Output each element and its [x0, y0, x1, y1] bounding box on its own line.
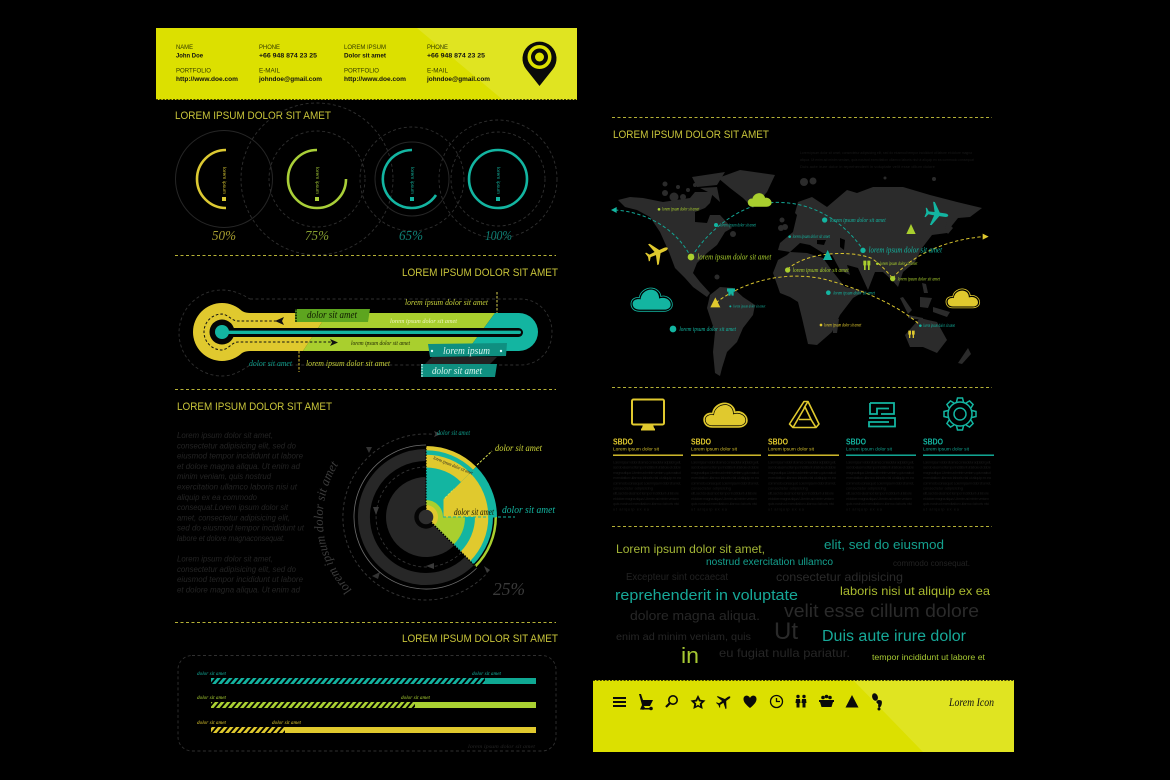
gauge 50%: 50% — [212, 229, 236, 244]
text block: paragraphs: exercitation ullamco laboris nisi ut — [177, 482, 298, 492]
ribbon: dolor sit amet teal — [421, 364, 497, 377]
column 1: exercitation ullamco laboris nisi ut aliquip ex ea — [613, 475, 682, 480]
panel: contact header: http://www.doe.com — [176, 76, 238, 83]
label: dolor sit amet — [454, 507, 494, 517]
gauge 50% — [176, 130, 272, 244]
bar teal: dolor sit amet — [197, 671, 226, 677]
panel: word cloud: commodo consequat. — [893, 558, 970, 568]
icon: menu — [613, 697, 626, 707]
column 5: magna aliqua. Ut enim ad minim veniam, quis nostrud — [923, 470, 991, 475]
icon: clock — [770, 696, 782, 708]
column 4 — [846, 403, 916, 511]
panel: contact header: LOREM IPSUM — [344, 44, 386, 51]
map labels: lorem ipsum dolor sit amet — [898, 276, 940, 282]
panel: word cloud: velit esse cillum dolore — [784, 601, 979, 621]
panel: contact header: PHONE — [427, 44, 449, 51]
label: dolor sit amet — [437, 428, 471, 437]
pie wedge — [426, 446, 497, 568]
map labels: lorem ipsum dolor sit amet — [793, 267, 849, 274]
panel: contact header: Dolor sit amet — [344, 52, 387, 60]
map labels: lorem ipsum dolor sit amet — [880, 262, 918, 267]
map labels: lorem ipsum dolor sit amet — [923, 324, 955, 329]
panel: contact header: John Doe — [176, 52, 203, 60]
label: dolor sit amet — [249, 358, 293, 368]
column 5: SBDO — [923, 436, 943, 446]
routes — [615, 202, 983, 325]
column 2: elit, sed do eiusmod tempor incididunt ut labore — [691, 491, 758, 496]
bar lime — [197, 695, 536, 708]
map labels: lorem ipsum dolor sit amet — [720, 223, 757, 228]
heading: map: LOREM IPSUM DOLOR SIT AMET — [613, 129, 769, 141]
text block: paragraphs: et dolore magna aliqua. Ut enim ad — [177, 462, 301, 471]
column 4: elit, sed do eiusmod tempor incididunt ut labore — [846, 491, 913, 496]
icon: cart — [639, 694, 653, 710]
map labels: lorem ipsum dolor sit amet — [824, 324, 862, 329]
bar yellow: dolor sit amet — [272, 720, 301, 726]
arrow: left — [275, 317, 284, 325]
map: continents — [618, 170, 982, 376]
column 5: elit, sed do eiusmod tempor incididunt ut labore — [923, 491, 990, 496]
panel: circular gauges — [176, 103, 557, 255]
panel: word cloud: Duis aute irure dolor — [822, 628, 966, 645]
map labels: lorem ipsum dolor sit amet — [869, 245, 942, 255]
icon: yellow cloud — [946, 289, 980, 308]
icon: yellow plane — [642, 238, 672, 268]
column 1: consectetur adipisicing — [613, 486, 653, 490]
column 4: et dolore magna aliqua. Ut enim ad minim veniam — [846, 496, 913, 501]
gauge 65%: 65% — [399, 229, 423, 244]
column 4: exercitation ullamco laboris nisi ut aliquip ex ea — [846, 475, 915, 480]
column 2: commodo consequat. Lorem ipsum dolor sit amet, — [691, 480, 759, 485]
map labels: lorem ipsum dolor sit amet — [733, 304, 766, 309]
column 2 — [691, 403, 761, 511]
column 3: SBDO — [768, 436, 788, 446]
panel: word cloud: tempor incididunt ut labore et — [872, 652, 986, 662]
icon: star — [690, 695, 706, 709]
column 3: quis nostrud exercitation ullamco laboris nisi — [768, 501, 834, 506]
column 3: Lorem ipsum dolor sit amet, consectetur adipisicing elit, — [768, 460, 836, 464]
text block: paragraphs: amet, consectetur adipisicing elit, — [177, 513, 290, 522]
icon: plane — [713, 690, 735, 712]
panel: contact header: PORTFOLIO — [176, 68, 211, 74]
text block: map intro: Lorem ipsum dolor sit amet, consectetur adipisicing elit, sed do eiusmod tempor incididunt ut labore et dolore magna — [800, 150, 973, 155]
panel: icon footer — [593, 680, 1014, 752]
ribbon: dolor sit amet lime: dolor sit amet — [307, 310, 357, 321]
label: lorem ipsum dolor sit amet — [390, 318, 457, 325]
map labels: lorem ipsum dolor sit amet — [793, 235, 831, 240]
column 1: Lorem ipsum dolor sit — [613, 446, 660, 452]
column 3: commodo consequat. Lorem ipsum dolor sit amet, — [768, 480, 836, 485]
map labels: lorem ipsum dolor sit amet — [833, 291, 875, 296]
label: lorem ipsum dolor sit amet — [405, 297, 489, 307]
panel: feature columns — [613, 398, 994, 511]
panel: progress bars — [178, 656, 556, 751]
column 1: ut aliquip ex ea — [613, 506, 650, 511]
panel: contact header: NAME — [176, 44, 194, 51]
text block: paragraphs: labore et dolore magnaconsequat. — [177, 534, 285, 543]
text block: paragraphs: eiusmod tempor incididunt ut labore — [177, 575, 304, 584]
text block: paragraphs: minim veniam, quis nostrud — [177, 472, 272, 481]
panel: contact header: E-MAIL — [427, 68, 448, 74]
column 1: sed do eiusmod tempor incididunt ut labore et dolore — [613, 465, 682, 470]
label: lorem ipsum dolor sit amet — [432, 456, 473, 477]
column 3: magna aliqua. Ut enim ad minim veniam, quis nostrud — [768, 470, 836, 475]
column 4: commodo consequat. Lorem ipsum dolor sit amet, — [846, 480, 914, 485]
panel: contact header: +66 948 874 23 25 — [427, 52, 485, 60]
column 3: ut aliquip ex ea — [768, 506, 805, 511]
arrow: right — [330, 339, 338, 346]
bar lime: dolor sit amet — [197, 695, 226, 701]
panel: word cloud: laboris nisi ut aliquip ex ea — [840, 584, 990, 598]
text block: paragraphs: eiusmod tempor incididunt ut labore — [177, 452, 304, 461]
column 5 — [923, 398, 994, 511]
arrow — [434, 431, 441, 437]
icon: basket — [819, 695, 834, 707]
gauge 100%: 100% — [485, 229, 512, 244]
panel: word cloud: reprehenderit in voluptate — [615, 587, 798, 604]
heading: progress bars: LOREM IPSUM DOLOR SIT AMET — [402, 633, 558, 645]
map labels: lorem ipsum dolor sit amet — [679, 326, 736, 333]
panel: contact header: +66 948 874 23 25 — [259, 52, 317, 60]
gauge 65%: lorem ipsum — [410, 167, 415, 194]
column 5: Lorem ipsum dolor sit — [923, 446, 970, 452]
column 5: Lorem ipsum dolor sit amet, consectetur adipisicing elit, — [923, 460, 991, 464]
panel: word cloud: nostrud exercitation ullamco — [706, 557, 833, 568]
panel: word cloud — [615, 537, 990, 668]
gauge 100% — [439, 120, 557, 244]
map labels: lorem ipsum dolor sit amet — [662, 208, 700, 213]
label: Lorem Icon: Lorem Icon — [948, 695, 994, 709]
column 5: quis nostrud exercitation ullamco laboris nisi — [923, 501, 989, 506]
ribbon: lorem ipsum teal — [428, 343, 507, 357]
column 4: ut aliquip ex ea — [846, 506, 883, 511]
column 3: Lorem ipsum dolor sit — [768, 446, 815, 452]
column 4: consectetur adipisicing — [846, 486, 886, 490]
icon: lime cloud — [748, 193, 771, 207]
column 3: exercitation ullamco laboris nisi ut aliquip ex ea — [768, 475, 837, 480]
column 3: sed do eiusmod tempor incididunt ut labore et dolore — [768, 465, 837, 470]
text block: paragraphs: Lorem ipsum dolor sit amet, — [177, 554, 273, 564]
column 2: quis nostrud exercitation ullamco laboris nisi — [691, 501, 757, 506]
panel: word cloud: in — [681, 643, 699, 668]
panel: thermometer bar — [179, 290, 552, 377]
column 5: consectetur adipisicing — [923, 486, 963, 490]
panel: word cloud: Lorem ipsum dolor sit amet, — [616, 542, 765, 556]
column 4: SBDO — [846, 436, 866, 446]
column 1: SBDO — [613, 436, 633, 446]
panel: contact header — [156, 28, 577, 100]
column 2: exercitation ullamco laboris nisi ut aliquip ex ea — [691, 475, 760, 480]
text block: paragraphs: consectetur adipisicing elit, sed do — [177, 441, 297, 450]
ribbon: dolor sit amet teal: dolor sit amet — [432, 366, 482, 377]
panel: word cloud: elit, sed do eiusmod — [824, 537, 944, 552]
heading: timeline bar: LOREM IPSUM DOLOR SIT AMET — [402, 267, 558, 279]
icon: location pin — [522, 42, 556, 86]
chart: radial pie — [314, 428, 556, 600]
panel: word cloud: enim ad minim veniam, quis — [616, 631, 751, 643]
panel: word cloud: consectetur adipisicing — [776, 570, 903, 584]
icon: people — [727, 261, 915, 338]
label: 25%: 25% — [493, 579, 525, 599]
column 1: quis nostrud exercitation ullamco laboris nisi — [613, 501, 679, 506]
column 2: ut aliquip ex ea — [691, 506, 728, 511]
text block: paragraphs: consectetur adipisicing elit, sed do — [177, 565, 297, 574]
column 3 — [768, 402, 839, 511]
column 5: ut aliquip ex ea — [923, 506, 960, 511]
column 5: exercitation ullamco laboris nisi ut aliquip ex ea — [923, 475, 992, 480]
caption: lorem ipsum dolor sit amet — [468, 744, 536, 750]
bar yellow: dolor sit amet — [197, 720, 226, 726]
panel: contact header: PHONE — [259, 44, 281, 51]
map labels — [658, 208, 955, 333]
column 2: Lorem ipsum dolor sit amet, consectetur adipisicing elit, — [691, 460, 759, 464]
icon: cloud — [704, 403, 748, 428]
bar yellow — [197, 720, 536, 733]
panel: contact header: johndoe@gmail.com — [258, 76, 322, 83]
icon: tents — [710, 224, 916, 307]
curved label: lorem ipsum dolor sit amet — [314, 461, 352, 595]
bar teal — [197, 671, 536, 684]
text block: map intro: aliqua. Ut enim ad minim veniam, quis nostrud exercitation ullamco laboris nisi ut aliquip ex ea commodo consequat — [800, 157, 975, 162]
gauge 65% — [360, 127, 464, 244]
gauge 75%: lorem ipsum — [315, 167, 320, 194]
map labels: lorem ipsum dolor sit amet — [697, 252, 772, 262]
text block: paragraphs — [177, 431, 305, 594]
text block: paragraphs: consequat.Lorem ipsum dolor sit — [177, 503, 289, 512]
column 2: SBDO — [691, 436, 711, 446]
map overlays: routes, icons, labels — [611, 193, 989, 338]
panel: word cloud: eu fugiat nulla pariatur. — [719, 646, 850, 660]
column 3: elit, sed do eiusmod tempor incididunt ut labore — [768, 491, 835, 496]
column 4: Lorem ipsum dolor sit amet, consectetur adipisicing elit, — [846, 460, 914, 464]
panel: word cloud: Ut — [774, 618, 798, 645]
text block: paragraphs: aliquip ex ea commodo — [177, 493, 258, 502]
ribbon: lorem ipsum teal: lorem ipsum — [443, 345, 490, 357]
icon: people — [796, 695, 806, 708]
label: lorem ipsum dolor sit amet — [351, 340, 410, 347]
gauge 75%: 75% — [305, 229, 329, 244]
gauge 75% — [241, 103, 393, 255]
column 2: magna aliqua. Ut enim ad minim veniam, quis nostrud — [691, 470, 759, 475]
text block: paragraphs: et dolore magna aliqua. Ut enim ad — [177, 585, 301, 594]
bar teal: dolor sit amet — [472, 671, 501, 677]
column 3: et dolore magna aliqua. Ut enim ad minim veniam — [768, 496, 835, 501]
panel: word cloud: Excepteur sint occaecat — [626, 572, 728, 583]
text block: paragraphs: sed do eiusmod tempor incididunt ut — [177, 524, 305, 533]
column 5: sed do eiusmod tempor incididunt ut labore et dolore — [923, 465, 992, 470]
text block: map intro: Duis aute irure dolor in reprehenderit in voluptate velit esse cillum dolore — [800, 164, 936, 169]
panel: contact header: PORTFOLIO — [344, 68, 379, 74]
column 3: consectetur adipisicing — [768, 486, 808, 490]
column 1 — [613, 400, 683, 511]
label: lorem ipsum dolor sit amet — [306, 358, 391, 368]
column 2: et dolore magna aliqua. Ut enim ad minim veniam — [691, 496, 758, 501]
icon: tent — [846, 695, 858, 708]
column 5: et dolore magna aliqua. Ut enim ad minim veniam — [923, 496, 990, 501]
label: dolor sit amet — [502, 505, 556, 516]
gauge 100%: lorem ipsum — [496, 167, 501, 194]
icon: footprints — [871, 692, 883, 710]
heading: pie chart: LOREM IPSUM DOLOR SIT AMET — [177, 401, 332, 413]
gauge 50%: lorem ipsum — [222, 167, 227, 194]
icon: search — [666, 696, 677, 707]
chart: world map with routes — [611, 170, 989, 376]
column 2: sed do eiusmod tempor incididunt ut labore et dolore — [691, 465, 760, 470]
icon: heart — [744, 696, 756, 708]
bar lime: dolor sit amet — [401, 695, 430, 701]
column 1: elit, sed do eiusmod tempor incididunt ut labore — [613, 491, 680, 496]
text block: map intro — [800, 150, 975, 169]
panel: contact header: E-MAIL — [259, 68, 280, 74]
column 1: et dolore magna aliqua. Ut enim ad minim veniam — [613, 496, 680, 501]
icon: maze — [869, 403, 895, 426]
icon: teal cloud — [631, 288, 672, 311]
column 1: magna aliqua. Ut enim ad minim veniam, quis nostrud — [613, 470, 681, 475]
arrow: route west — [611, 207, 617, 213]
map labels: lorem ipsum dolor sit amet — [830, 217, 886, 224]
panel: contact header: johndoe@gmail.com — [426, 76, 490, 83]
column 4: quis nostrud exercitation ullamco laboris nisi — [846, 501, 912, 506]
icon: teal plane — [923, 201, 950, 227]
column 2: consectetur adipisicing — [691, 486, 731, 490]
text block: paragraphs: Lorem ipsum dolor sit amet, — [177, 431, 273, 440]
ribbon: dolor sit amet lime — [295, 309, 370, 322]
column 4: sed do eiusmod tempor incididunt ut labore et dolore — [846, 465, 915, 470]
column 4: magna aliqua. Ut enim ad minim veniam, quis nostrud — [846, 470, 914, 475]
panel: word cloud: dolore magna aliqua. — [630, 608, 760, 623]
column 1: Lorem ipsum dolor sit amet, consectetur adipisicing elit, — [613, 460, 681, 464]
heading: gauges: LOREM IPSUM DOLOR SIT AMET — [175, 110, 331, 122]
column 5: commodo consequat. Lorem ipsum dolor sit amet, — [923, 480, 991, 485]
panel: contact header: http://www.doe.com — [344, 76, 406, 83]
icon: impossible triangle — [790, 402, 819, 428]
arrow: route east — [983, 234, 989, 240]
column 2: Lorem ipsum dolor sit — [691, 446, 738, 452]
icon: monitor — [632, 400, 664, 430]
label: dolor sit amet — [495, 444, 542, 454]
column 1: commodo consequat. Lorem ipsum dolor sit amet, — [613, 480, 681, 485]
column 4: Lorem ipsum dolor sit — [846, 446, 893, 452]
icon: gear — [944, 398, 976, 430]
